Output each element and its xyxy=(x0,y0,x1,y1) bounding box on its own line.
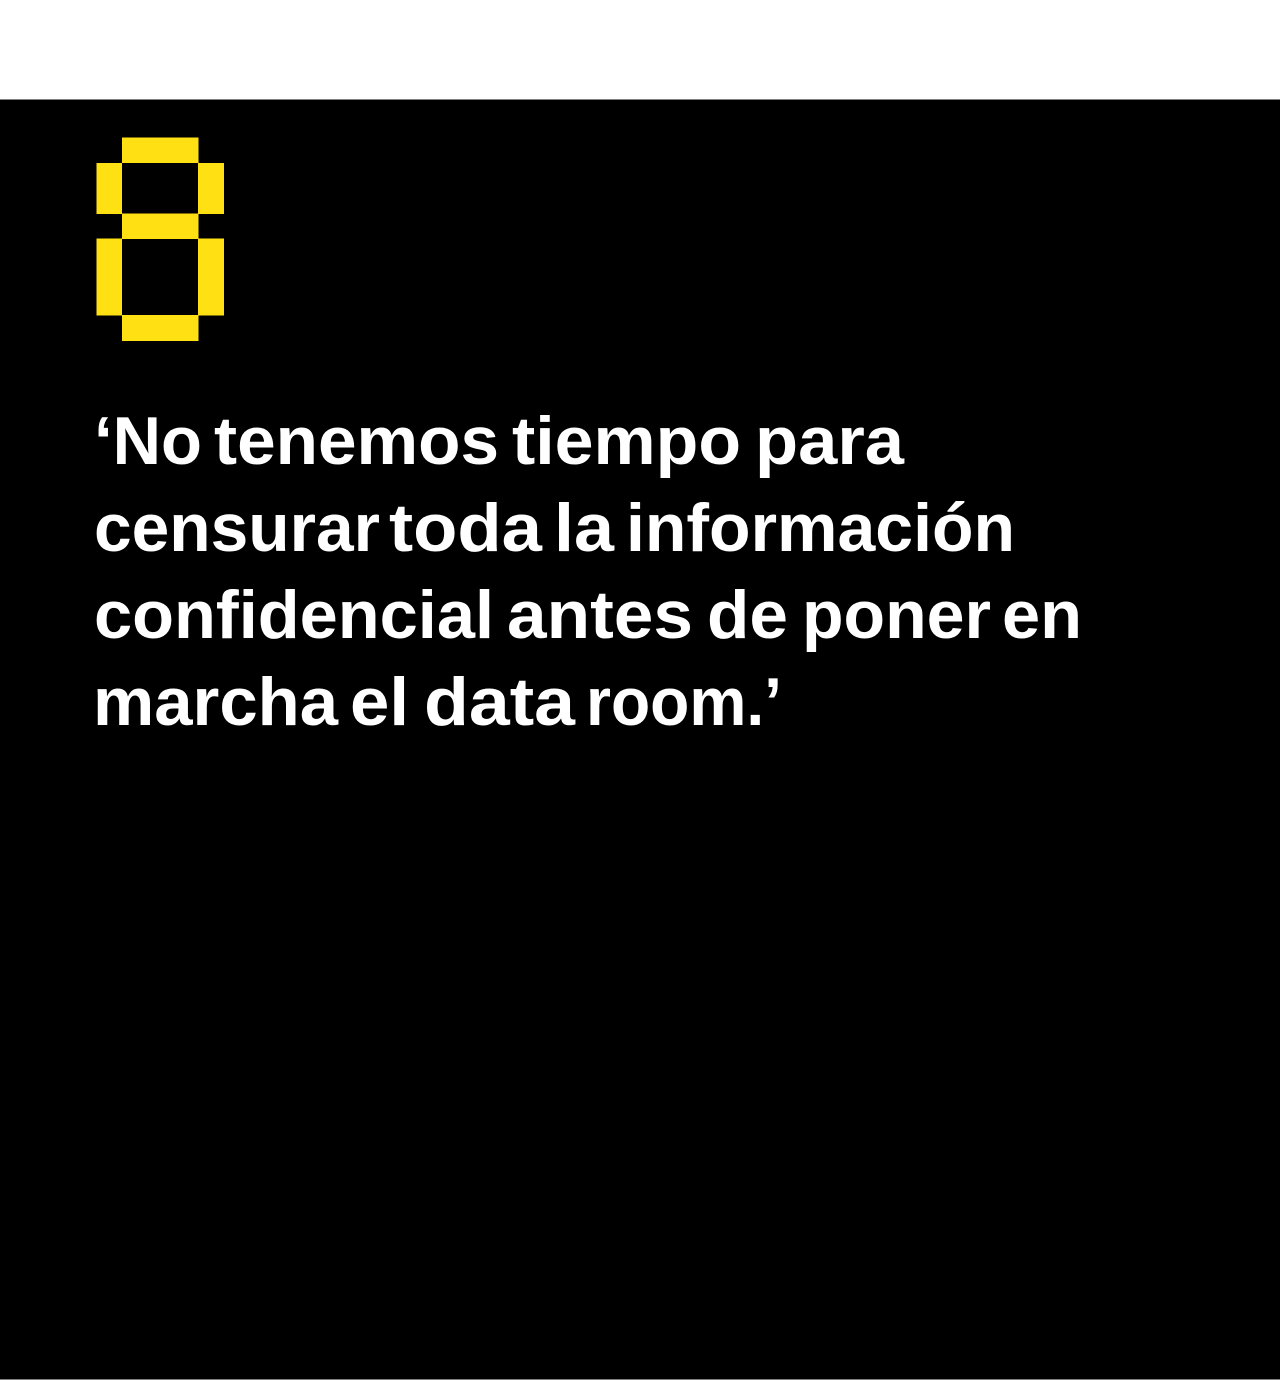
quote text xyxy=(93,403,1082,740)
quote text: toda xyxy=(389,490,543,566)
quote text: antes xyxy=(507,577,693,653)
quote text: ‘No xyxy=(94,403,202,479)
quote text: confidencial xyxy=(94,577,494,653)
quote text: poner xyxy=(802,577,991,653)
quote text: el xyxy=(350,664,409,740)
icon: yellow segmented number 8 xyxy=(96,138,224,341)
quote text: tiempo xyxy=(512,403,741,479)
quote text: room.’ xyxy=(586,664,782,740)
quote text: para xyxy=(755,403,905,479)
quote text: de xyxy=(707,577,788,653)
quote text: información xyxy=(626,490,1015,566)
quote text: tenemos xyxy=(214,403,499,479)
quote text: la xyxy=(554,490,615,566)
quote text: marcha xyxy=(93,664,339,740)
quote text: en xyxy=(1002,577,1082,653)
quote text: data xyxy=(424,664,576,740)
quote text: censurar xyxy=(94,490,380,566)
